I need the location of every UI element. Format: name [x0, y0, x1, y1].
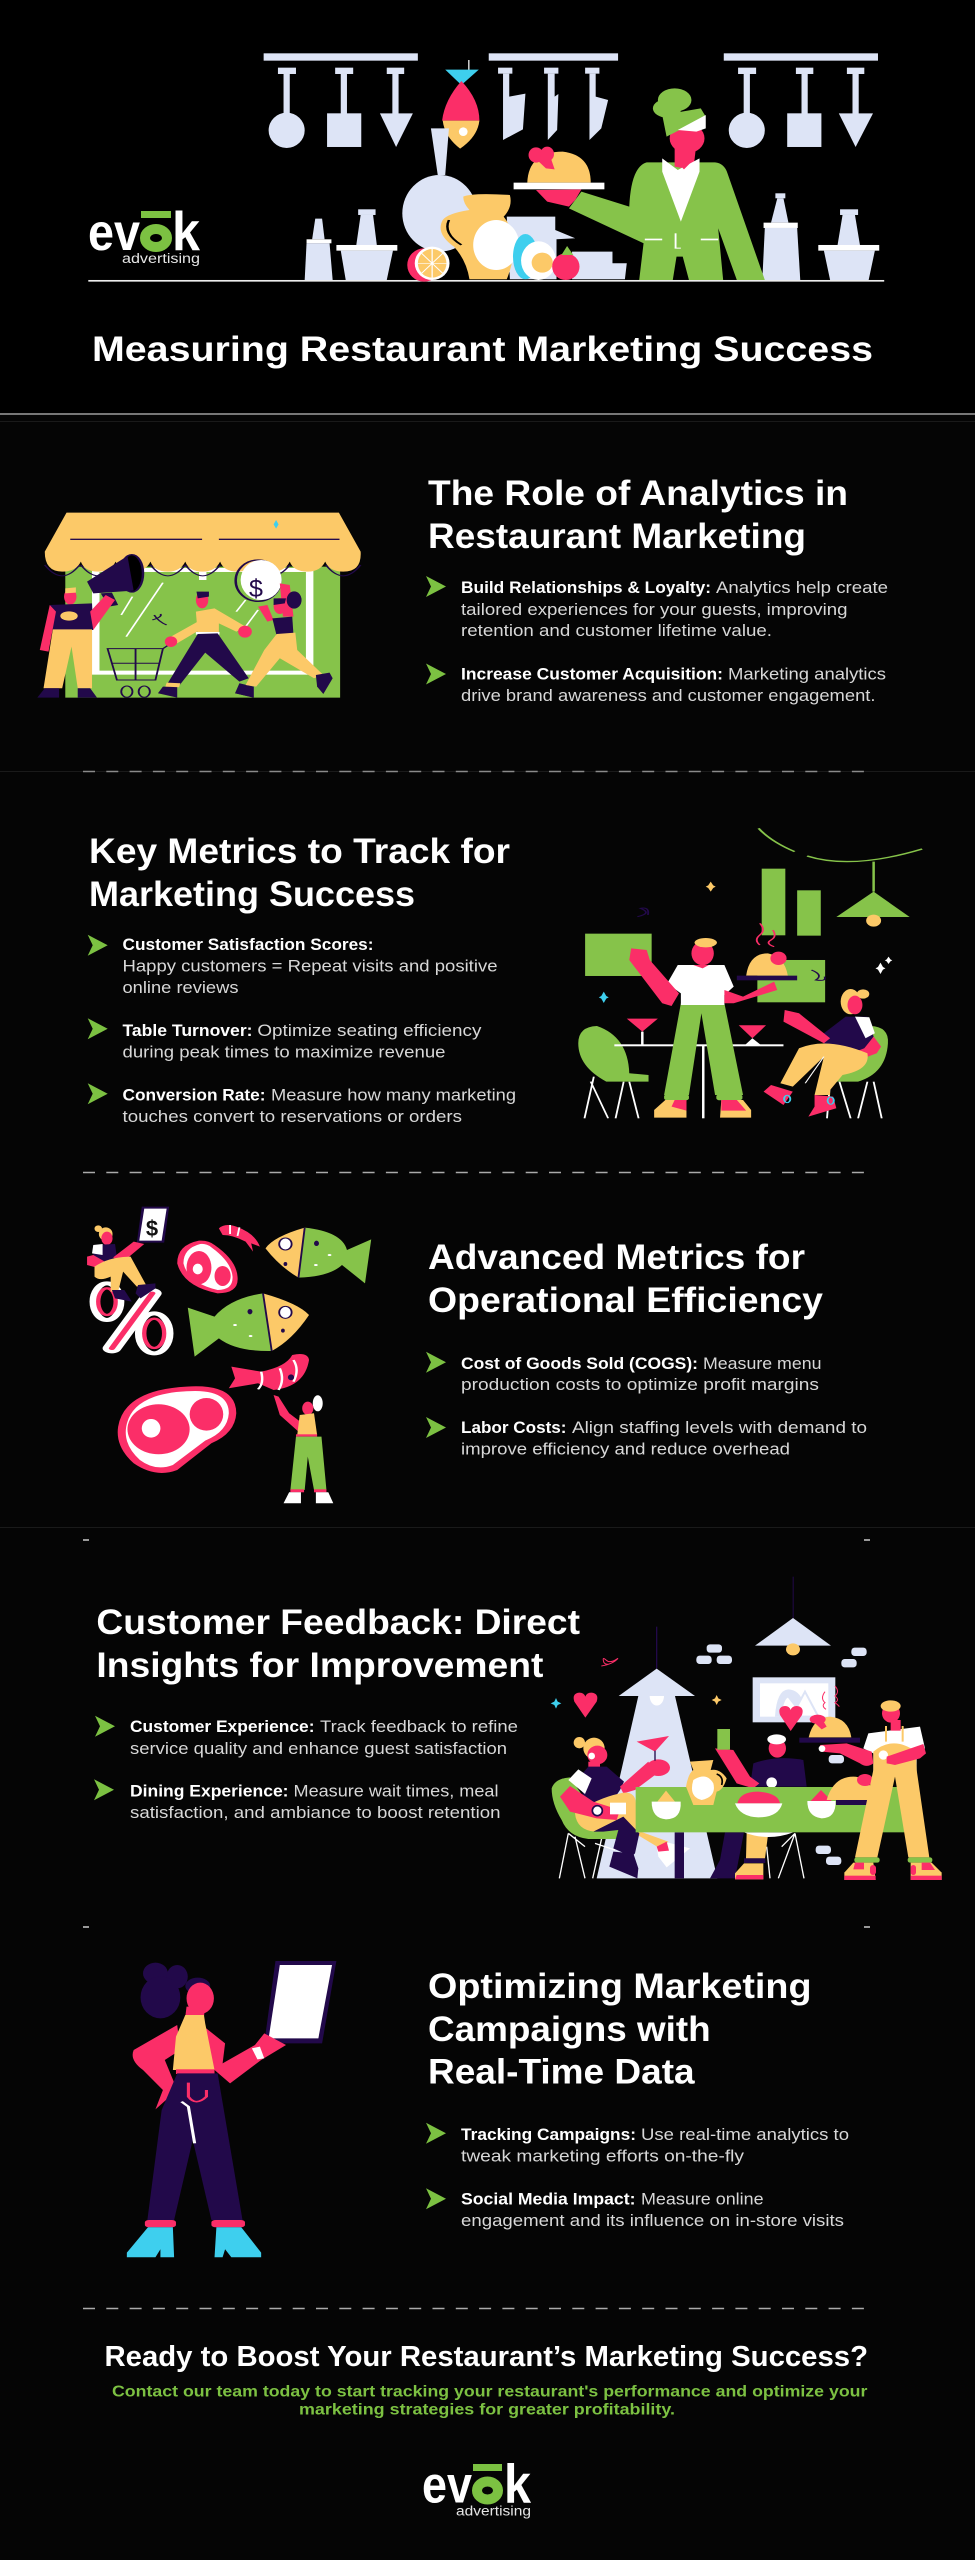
percent sign [93, 1283, 170, 1353]
hair [141, 1963, 210, 2018]
wall bricks [696, 1644, 867, 1865]
heading [89, 832, 510, 914]
bullet: turnover: Table Turnover: [122, 1022, 252, 1040]
standing woman pointing [274, 1395, 333, 1503]
heading [96, 1603, 580, 1685]
bullet: relationships [426, 576, 888, 640]
bullet: customer experience: service quality and enhance guest satisfaction [130, 1740, 507, 1758]
bullet: labor: Align staffing levels with demand to [572, 1419, 867, 1437]
table with cocktails [614, 1019, 783, 1118]
section: advanced metrics text [426, 1238, 867, 1458]
illustration: waiter and seated diner [578, 828, 922, 1118]
bullet: customer experience: Track feedback to refine [320, 1718, 518, 1736]
heading: Insights for Improvement [96, 1646, 544, 1685]
bullet: COGS [426, 1352, 822, 1394]
bullet: turnover [88, 1018, 482, 1062]
serving cloche [514, 147, 604, 189]
hanging lamp [759, 828, 922, 927]
logo: evok advertising footer: k [504, 2452, 531, 2514]
heading: Real-Time Data [428, 2052, 695, 2092]
bullet: COGS: production costs to optimize profit margins [461, 1376, 819, 1394]
bullet: labor [426, 1417, 867, 1458]
bullet: satisfaction: online reviews [122, 979, 238, 997]
tray and cloche [737, 952, 797, 980]
bullet: customer experience: Customer Experience: [130, 1718, 314, 1736]
large bottle and plates [402, 128, 627, 279]
lemon [407, 247, 450, 282]
wall painting [753, 1677, 835, 1722]
seated woman [764, 989, 888, 1118]
section: key metrics text [88, 832, 516, 1126]
section: analytics text [426, 474, 888, 705]
seated woman small [87, 1225, 155, 1302]
seated woman with cocktail [552, 1736, 690, 1878]
bullet: dining experience: Dining Experience: [130, 1782, 288, 1800]
bullet: acquisition: Increase Customer Acquisition: [461, 666, 723, 684]
illustration: woman holding a tablet [127, 1961, 336, 2257]
egg [513, 234, 556, 280]
bowls [652, 1790, 836, 1819]
person with megaphone [37, 587, 115, 698]
kitchen utensil racks [264, 53, 878, 148]
bullet: turnover: Optimize seating efficiency [257, 1022, 482, 1040]
heading: Operational Efficiency [428, 1281, 824, 1320]
bullet: COGS: Measure menu [703, 1355, 822, 1373]
cta body: Contact our team today to start tracking your restaurant's performance and optimize your [112, 2384, 867, 2401]
tablet with dollar [137, 1207, 169, 1243]
head and neck [185, 1983, 214, 2017]
logo: evok advertising footer [422, 2452, 531, 2518]
waiter [629, 938, 777, 1118]
shop building [65, 567, 340, 698]
heading: The Role of Analytics in [428, 474, 848, 513]
bullet: social: engagement and its influence on in-store visits [461, 2212, 844, 2230]
left chair [578, 1026, 649, 1118]
hearts and sparkles [551, 1658, 839, 1731]
bullet: turnover: during peak times to maximize revenue [122, 1044, 446, 1062]
megaphone [87, 555, 143, 607]
bullet: dining experience [94, 1779, 500, 1822]
illustration: diners at a restaurant table [551, 1577, 942, 1880]
bullet: relationships: Analytics help create [716, 579, 888, 597]
table [636, 1787, 904, 1832]
waiter in overalls [819, 1700, 942, 1880]
logo: evok advertising footer: ev [422, 2456, 472, 2514]
heading [428, 1238, 824, 1320]
bullet: acquisition: Marketing analytics [728, 666, 886, 684]
served cloche [799, 1715, 860, 1743]
bar chart blocks [585, 869, 825, 1002]
bullet: tracking: Use real-time analytics to [641, 2126, 849, 2144]
bullet: satisfaction: Customer Satisfaction Scores: [122, 936, 374, 954]
bullet: tracking: tweak marketing efforts on-the-fly [461, 2148, 745, 2166]
heading: Restaurant Marketing [428, 517, 806, 556]
logo: evok advertising header: advertising [122, 251, 200, 266]
heading: Marketing Success [89, 875, 415, 914]
logo: evok advertising header: k [172, 200, 200, 262]
footer logo green o [473, 2464, 502, 2500]
heading: Customer Feedback: Direct [96, 1603, 580, 1642]
bullet: conversion: touches convert to reservations or orders [122, 1108, 462, 1126]
heading: Optimizing Marketing [428, 1967, 812, 2006]
heading [428, 474, 848, 556]
trousers [147, 2069, 243, 2220]
dollar coin [236, 560, 282, 601]
cta heading: Ready to Boost Your Restaurant’s Marketing Success? [104, 2341, 868, 2373]
bullet: dining experience: satisfaction, and ambiance to boost retention [130, 1804, 500, 1822]
title: Measuring Restaurant Marketing Success [92, 330, 873, 369]
squiggle [152, 614, 167, 625]
pitcher on table [686, 1760, 727, 1805]
bottles [305, 193, 879, 280]
bullet: labor: Labor Costs: [461, 1419, 566, 1437]
dollar sign: $ [249, 575, 263, 603]
logo: evok advertising header [88, 200, 200, 266]
call to action [104, 2341, 868, 2419]
illustration: food items and figures [87, 1207, 371, 1503]
bullet: satisfaction: Happy customers = Repeat visits and positive [122, 958, 498, 976]
pitcher [441, 194, 519, 279]
awning [45, 513, 361, 576]
arms [133, 2022, 286, 2109]
section: customer feedback text [94, 1603, 580, 1822]
logo: evok advertising footer: advertising [456, 2504, 531, 2518]
tablet [264, 1961, 336, 2043]
man with phone [675, 1729, 807, 1879]
steak small [177, 1241, 238, 1293]
cta body: marketing strategies for greater profitability. [299, 2402, 675, 2419]
sparkles [599, 882, 892, 1003]
fish right facing tail [266, 1228, 371, 1283]
bullet: social [426, 2188, 844, 2230]
bullet: conversion: Conversion Rate: [122, 1086, 266, 1104]
boots [127, 2220, 261, 2257]
illustration: chef serving in a kitchen [88, 53, 884, 282]
bullet: dining experience: Measure wait times, meal [294, 1782, 498, 1800]
bullet: acquisition [426, 664, 886, 705]
bullet: relationships: tailored experiences for your guests, improving [461, 601, 848, 619]
chairs [559, 1833, 804, 1878]
shopping cart [108, 643, 171, 697]
bullet: conversion [88, 1083, 516, 1126]
man with cart [158, 592, 254, 698]
apple [552, 246, 580, 280]
heading: Campaigns with [428, 2010, 711, 2049]
bullet: tracking [426, 2123, 849, 2166]
shrimp small [219, 1225, 260, 1252]
chef figure [536, 88, 765, 280]
bullet: acquisition: drive brand awareness and customer engagement. [461, 687, 876, 705]
yellow top [173, 2015, 215, 2070]
logo green o [141, 211, 171, 247]
hanging fish [442, 60, 479, 149]
shrimp large [229, 1354, 309, 1390]
bullet: satisfaction [88, 935, 497, 997]
heading [428, 1967, 812, 2092]
heading: Key Metrics to Track for [89, 832, 510, 871]
pendant lamps [597, 1577, 831, 1878]
logo: evok advertising header: ev [88, 204, 140, 262]
bullet: social: Social Media Impact: [461, 2190, 636, 2208]
fish left facing tail [188, 1293, 309, 1357]
heading: Advanced Metrics for [428, 1238, 805, 1277]
bullet: labor: improve efficiency and reduce overhead [461, 1440, 790, 1458]
illustration: storefront with shoppers [37, 513, 361, 698]
section: real-time data text [426, 1967, 849, 2230]
bullet: relationships: retention and customer lifetime value. [461, 622, 772, 640]
bullet: social: Measure online [641, 2190, 764, 2208]
bullet: customer experience [95, 1716, 518, 1758]
cta body [112, 2384, 867, 2419]
bullet: tracking: Tracking Campaigns: [461, 2126, 636, 2144]
bullet: COGS: Cost of Goods Sold (COGS): [461, 1355, 698, 1373]
steak large [118, 1386, 236, 1473]
tablet dollar sign: $ [146, 1216, 158, 1241]
bullet: relationships: Build Relationships & Loyalty: [461, 579, 711, 597]
woman with coin [235, 583, 333, 698]
second cloche on table [827, 1774, 877, 1805]
bullet: conversion: Measure how many marketing [271, 1086, 516, 1104]
